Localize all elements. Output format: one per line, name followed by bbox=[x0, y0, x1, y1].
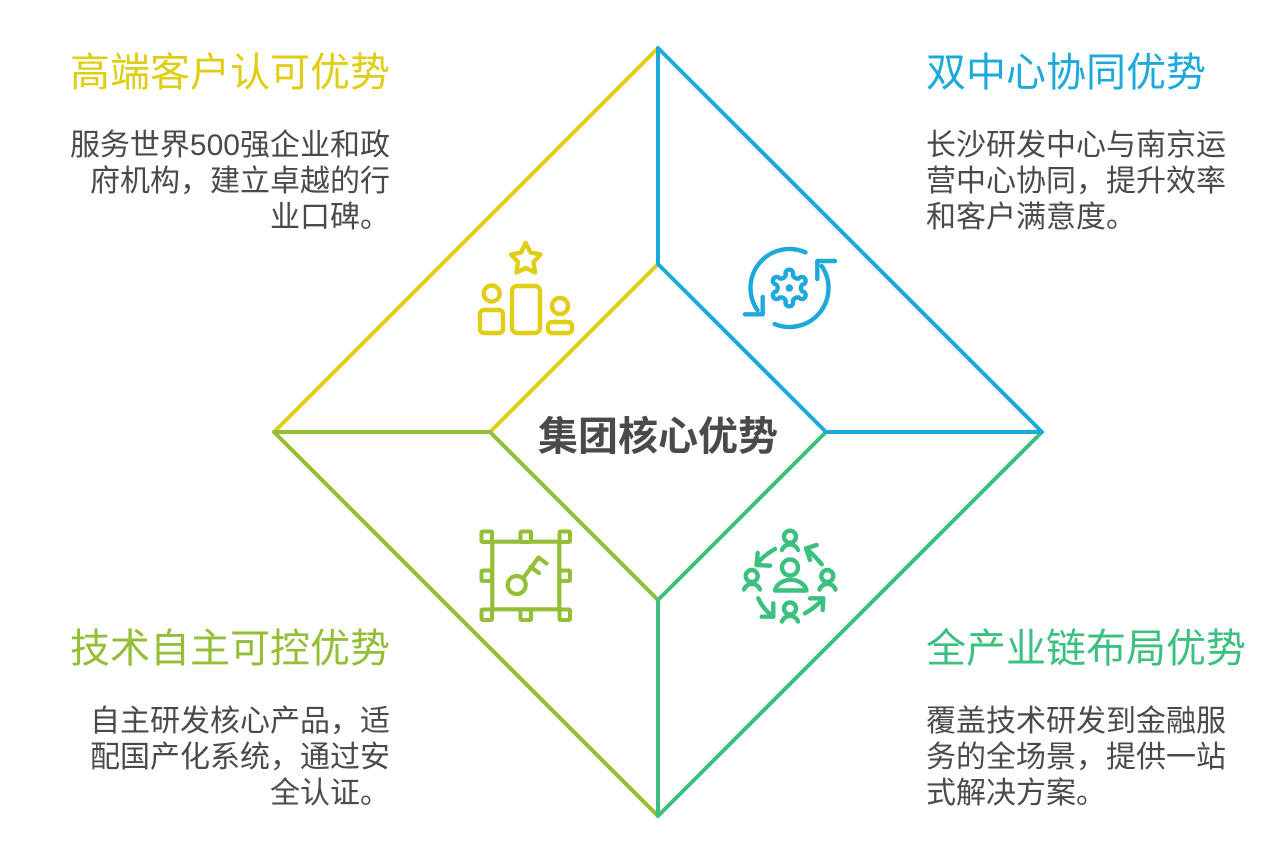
body text: top right: 长沙研发中心与南京运 bbox=[926, 129, 1226, 162]
panel: bottom-right quadrant outline bbox=[658, 432, 1042, 816]
heading: top right: 双中心协同优势 bbox=[926, 51, 1206, 95]
center label: 集团核心优势 bbox=[538, 415, 778, 459]
icon: gear with rotation arrows bbox=[745, 249, 835, 327]
icon: people network with arrows bbox=[744, 531, 836, 622]
body text: bottom left: 自主研发核心产品，适 bbox=[90, 705, 390, 738]
heading: top left: 高端客户认可优势 bbox=[70, 51, 390, 95]
body text: top left: 业口碑。 bbox=[270, 201, 390, 234]
icon: podium with star bbox=[480, 243, 572, 333]
text block: independent technology bbox=[70, 627, 390, 810]
text block: high-end customer recognition bbox=[70, 51, 390, 234]
body text: bottom right: 式解决方案。 bbox=[926, 777, 1106, 810]
body text: bottom left: 全认证。 bbox=[270, 777, 390, 810]
body text: top right: 营中心协同，提升效率 bbox=[926, 165, 1226, 198]
panel: top-right quadrant outline bbox=[658, 48, 1042, 432]
panel: bottom-left quadrant outline bbox=[274, 432, 658, 816]
body text: bottom left bbox=[90, 705, 390, 810]
text block: dual center collaboration bbox=[926, 51, 1226, 234]
heading: bottom right: 全产业链布局优势 bbox=[926, 627, 1246, 671]
body text: top right: 和客户满意度。 bbox=[926, 201, 1136, 234]
body text: top left: 府机构，建立卓越的行 bbox=[90, 165, 390, 198]
body text: top left bbox=[70, 129, 390, 234]
body text: bottom right: 务的全场景，提供一站 bbox=[926, 741, 1226, 774]
body text: bottom right: 覆盖技术研发到金融服 bbox=[926, 705, 1226, 738]
body text: bottom left: 配国产化系统，通过安 bbox=[90, 741, 390, 774]
heading: bottom left: 技术自主可控优势 bbox=[70, 627, 390, 671]
body text: bottom right bbox=[926, 705, 1226, 810]
text block: full industry chain bbox=[926, 627, 1246, 810]
panel: top-left quadrant outline bbox=[274, 48, 658, 432]
icon: key in frame bbox=[482, 532, 570, 620]
body text: top left: 服务世界500强企业和政 bbox=[70, 129, 390, 162]
body text: top right bbox=[926, 129, 1226, 234]
